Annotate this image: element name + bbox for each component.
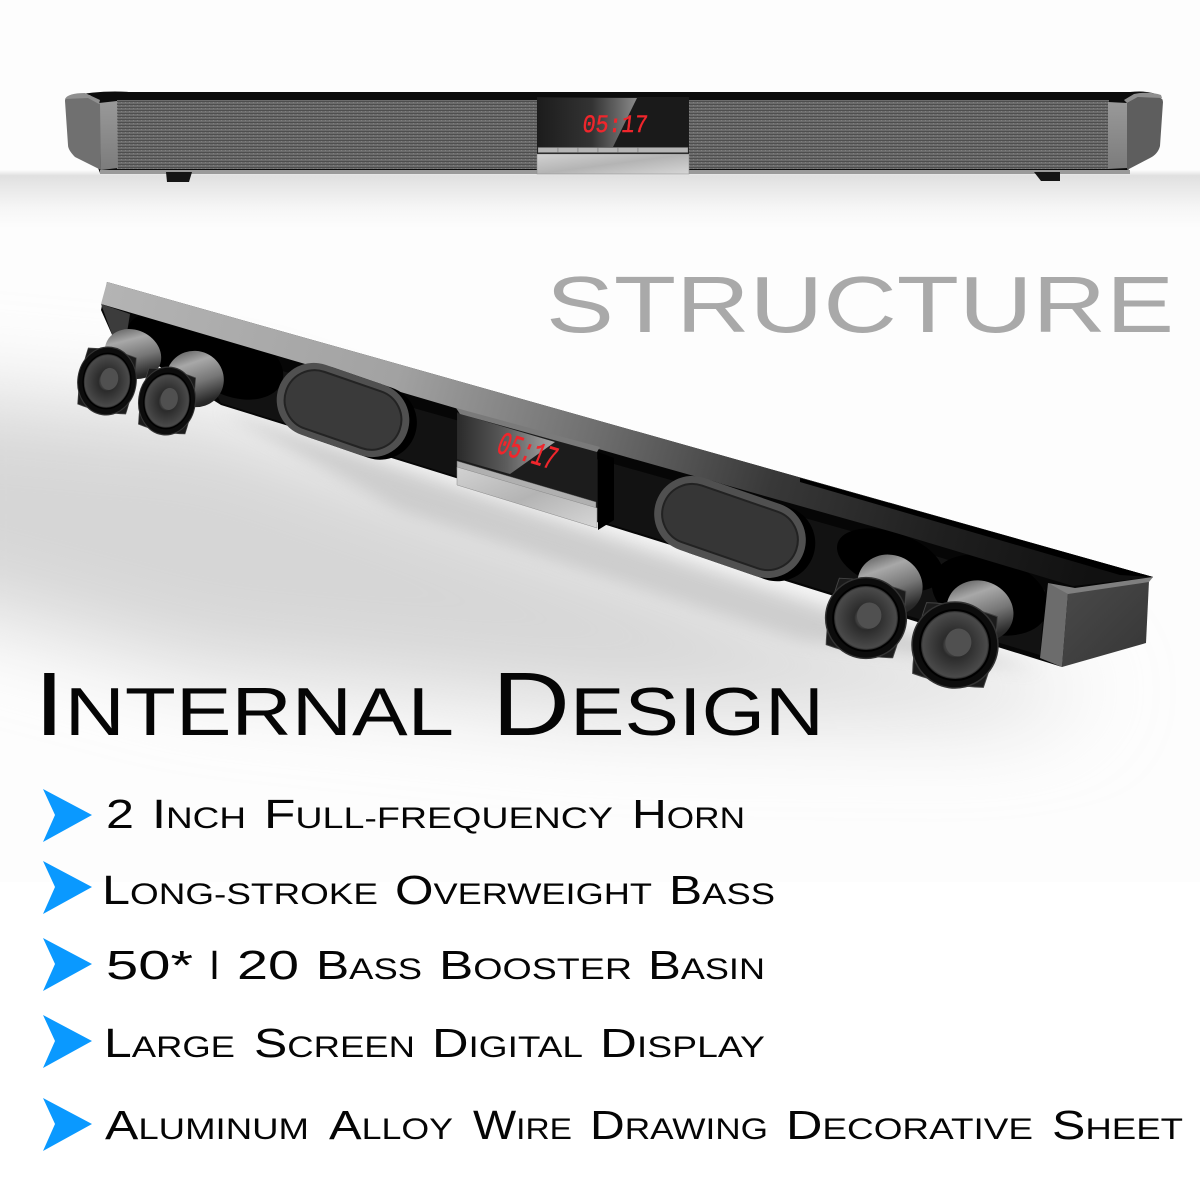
driver cavities — [119, 300, 1059, 650]
label: LARGE — [104, 1020, 235, 1066]
heading: internal design: INTERNAL — [34, 655, 454, 755]
touch buttons — [538, 148, 688, 152]
label: 50* — [106, 942, 193, 988]
panel: top product band — [0, 0, 1200, 228]
label: ALUMINUM — [105, 1102, 309, 1148]
label: DRAWING — [590, 1102, 768, 1148]
label — [104, 1020, 765, 1066]
heading: internal design: DESIGN — [492, 655, 824, 755]
icon: blue arrow — [43, 938, 92, 991]
right foot — [1034, 172, 1060, 181]
left end cap — [65, 93, 118, 170]
right end cap — [1040, 577, 1153, 667]
top lip — [456, 408, 600, 452]
label: HORN — [632, 791, 745, 837]
icon: blue arrow — [43, 1015, 92, 1068]
label: 2 — [106, 791, 134, 837]
angled soundbar — [73, 282, 1153, 694]
display panel — [537, 97, 689, 148]
top surface — [101, 282, 1153, 586]
heading: internal design — [34, 655, 824, 755]
label: ALLOY — [329, 1102, 453, 1148]
right drivers — [820, 545, 1023, 694]
floor shadow under top bar — [0, 170, 1200, 228]
label — [102, 867, 775, 913]
label: SCREEN — [254, 1020, 415, 1066]
label — [105, 1102, 1183, 1148]
black rear stripe highlight — [800, 478, 1153, 577]
feature 4 — [43, 1015, 765, 1068]
label — [106, 942, 765, 988]
label: WIRE — [473, 1102, 572, 1148]
center display — [456, 408, 614, 530]
right end cap — [1108, 93, 1163, 170]
label: DIGITAL — [432, 1020, 583, 1066]
brushed aluminum plate — [537, 154, 689, 174]
label: I — [209, 942, 220, 988]
touch buttons — [457, 461, 596, 511]
side bracket — [598, 452, 614, 530]
left speaker grille — [117, 100, 537, 169]
right passive radiator — [644, 466, 826, 592]
label: DISPLAY — [600, 1020, 765, 1066]
icon: blue arrow — [43, 1098, 92, 1151]
label: DECORATIVE — [786, 1102, 1033, 1148]
label: BASS — [316, 942, 422, 988]
glossy front face — [190, 345, 1045, 655]
label — [106, 791, 745, 837]
left drivers — [73, 320, 233, 439]
label: 20 — [237, 942, 299, 988]
feature 3 — [43, 938, 765, 991]
feature 1 — [43, 789, 745, 842]
label: LONG-STROKE — [102, 867, 378, 913]
brushed aluminum plate — [457, 467, 597, 528]
feature 5 — [43, 1098, 1183, 1151]
left inner frame — [101, 304, 130, 345]
icon: blue arrow — [43, 861, 92, 914]
left passive radiator — [267, 353, 427, 470]
label: INCH — [152, 791, 246, 837]
bar body — [101, 282, 1153, 667]
left foot — [166, 172, 192, 182]
clock digits: 05:17 — [581, 111, 649, 140]
display reflection — [457, 413, 555, 474]
label: SHEET — [1052, 1102, 1183, 1148]
icon: blue arrow — [43, 789, 92, 842]
top soundbar — [65, 92, 1163, 182]
right speaker grille — [689, 100, 1109, 169]
label: BASS — [669, 867, 775, 913]
clock digits: 05:17 — [491, 426, 563, 479]
label: BOOSTER — [439, 942, 632, 988]
label: OVERWEIGHT — [395, 867, 652, 913]
panel: angled product background shadow — [0, 355, 1068, 758]
feature 2 — [43, 861, 775, 914]
label: BASIN — [648, 942, 765, 988]
heading: structure: STRUCTURE — [546, 260, 1174, 349]
label: FULL-FREQUENCY — [264, 791, 613, 837]
bar body — [70, 92, 1160, 173]
